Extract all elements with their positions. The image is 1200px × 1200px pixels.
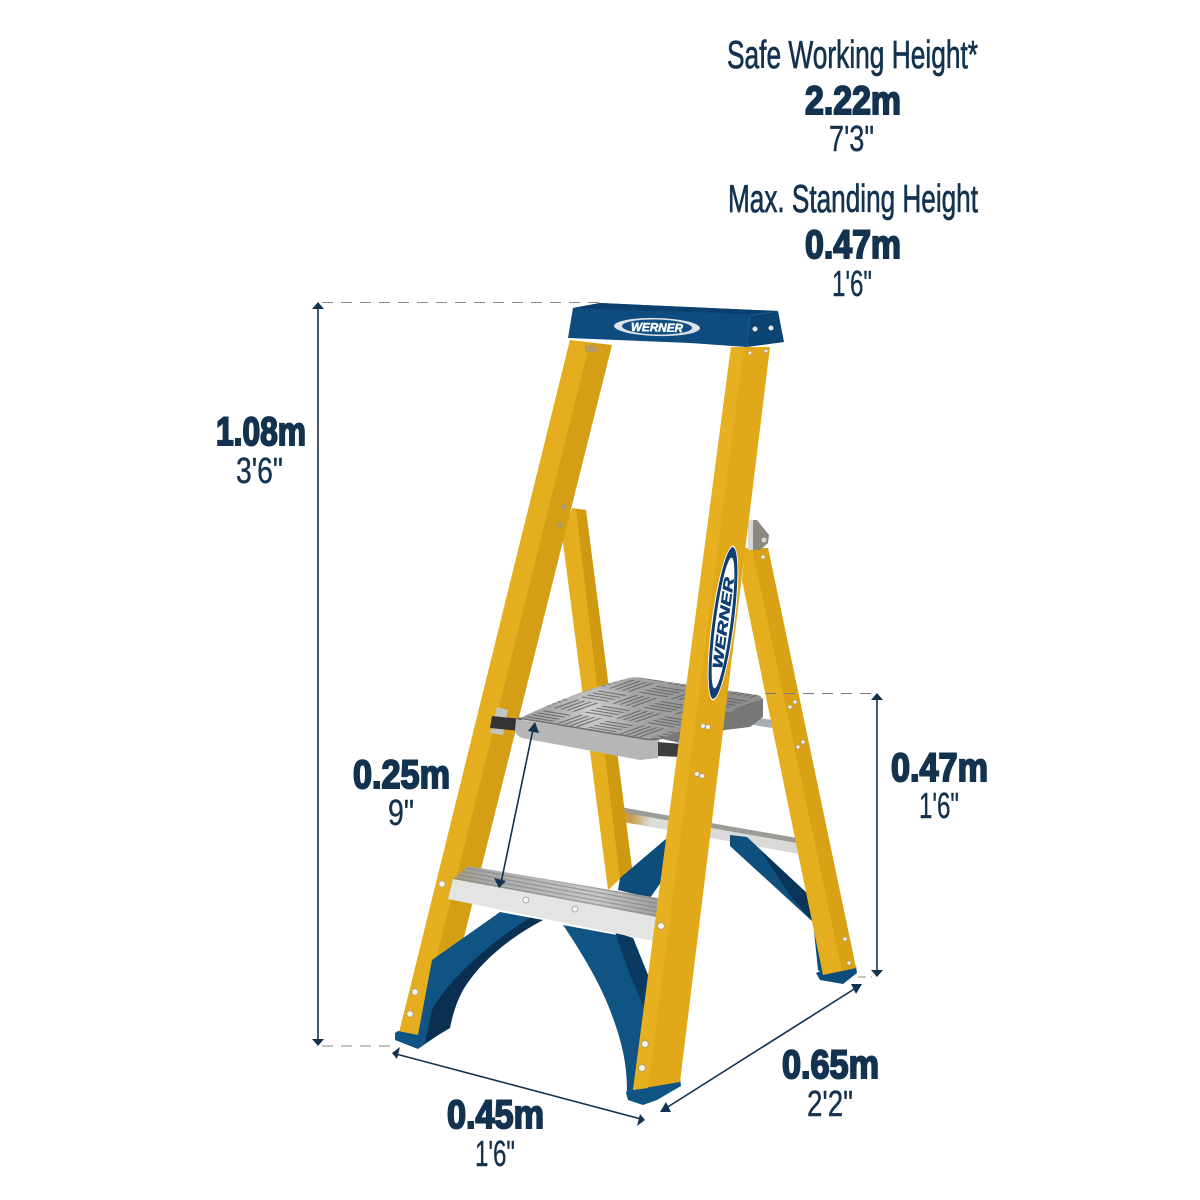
label: safe working height — [727, 34, 978, 159]
platform front tube — [658, 742, 682, 757]
dimension line: step spacing — [494, 722, 539, 888]
label: safe working height: Safe Working Height* — [727, 34, 978, 77]
hinge bracket — [748, 520, 769, 550]
Werner logo on right rail — [701, 544, 745, 702]
label: platform height value — [891, 746, 988, 826]
label: max standing height: Max. Standing Height — [728, 178, 978, 221]
Werner logo on cap — [614, 317, 700, 337]
label: safe working height: 2.22m — [805, 79, 901, 123]
platform right support tube — [753, 717, 772, 728]
label: step spacing value — [353, 753, 450, 833]
label: step spacing value: 0.25m — [353, 753, 450, 797]
rear left leg — [562, 508, 632, 890]
rear right foot — [816, 966, 857, 984]
aluminium lower step — [448, 866, 658, 941]
label: overall height value — [216, 410, 306, 491]
label: front width value: 1'6" — [475, 1133, 515, 1174]
label: step spacing value: 9" — [388, 792, 414, 833]
platform — [515, 677, 763, 760]
rear right blue brace — [730, 835, 826, 975]
dimension line: front width — [392, 1047, 645, 1126]
left tube and bracket — [490, 707, 522, 735]
label: front width value — [447, 1093, 544, 1174]
label: platform height value: 0.47m — [891, 746, 988, 790]
rivets — [407, 349, 851, 1071]
left blue brace — [395, 912, 543, 1049]
rear right leg — [742, 548, 856, 975]
Werner logo on right rail: WERNER — [709, 575, 737, 670]
label: safe working height: 7'3" — [829, 118, 874, 159]
label: depth value: 2'2" — [807, 1083, 853, 1124]
label: depth value: 0.65m — [782, 1043, 879, 1087]
platform side face — [658, 698, 763, 743]
top cap — [568, 303, 784, 347]
rear centre blue brace — [618, 838, 667, 898]
label: platform height value: 1'6" — [919, 785, 959, 826]
right front rail — [633, 347, 770, 1090]
label: overall height value: 1.08m — [216, 410, 306, 454]
dimension line: depth — [660, 984, 862, 1112]
label: max standing height — [728, 178, 978, 304]
right blue brace — [563, 925, 681, 1105]
left front rail — [399, 340, 612, 1036]
platform tread surface — [520, 677, 762, 740]
dimension line: overall height — [312, 302, 600, 1046]
label: front width value: 0.45m — [447, 1093, 544, 1137]
dimension line: platform height — [765, 693, 883, 977]
label: overall height value: 3'6" — [236, 450, 283, 491]
platform front face — [515, 719, 660, 760]
label: max standing height: 0.47m — [805, 223, 901, 267]
label: max standing height: 1'6" — [832, 263, 872, 304]
ladder illustration — [395, 303, 857, 1105]
Werner logo on cap: WERNER — [631, 320, 683, 335]
label: depth value — [782, 1043, 879, 1124]
rear cross strut — [608, 805, 799, 854]
